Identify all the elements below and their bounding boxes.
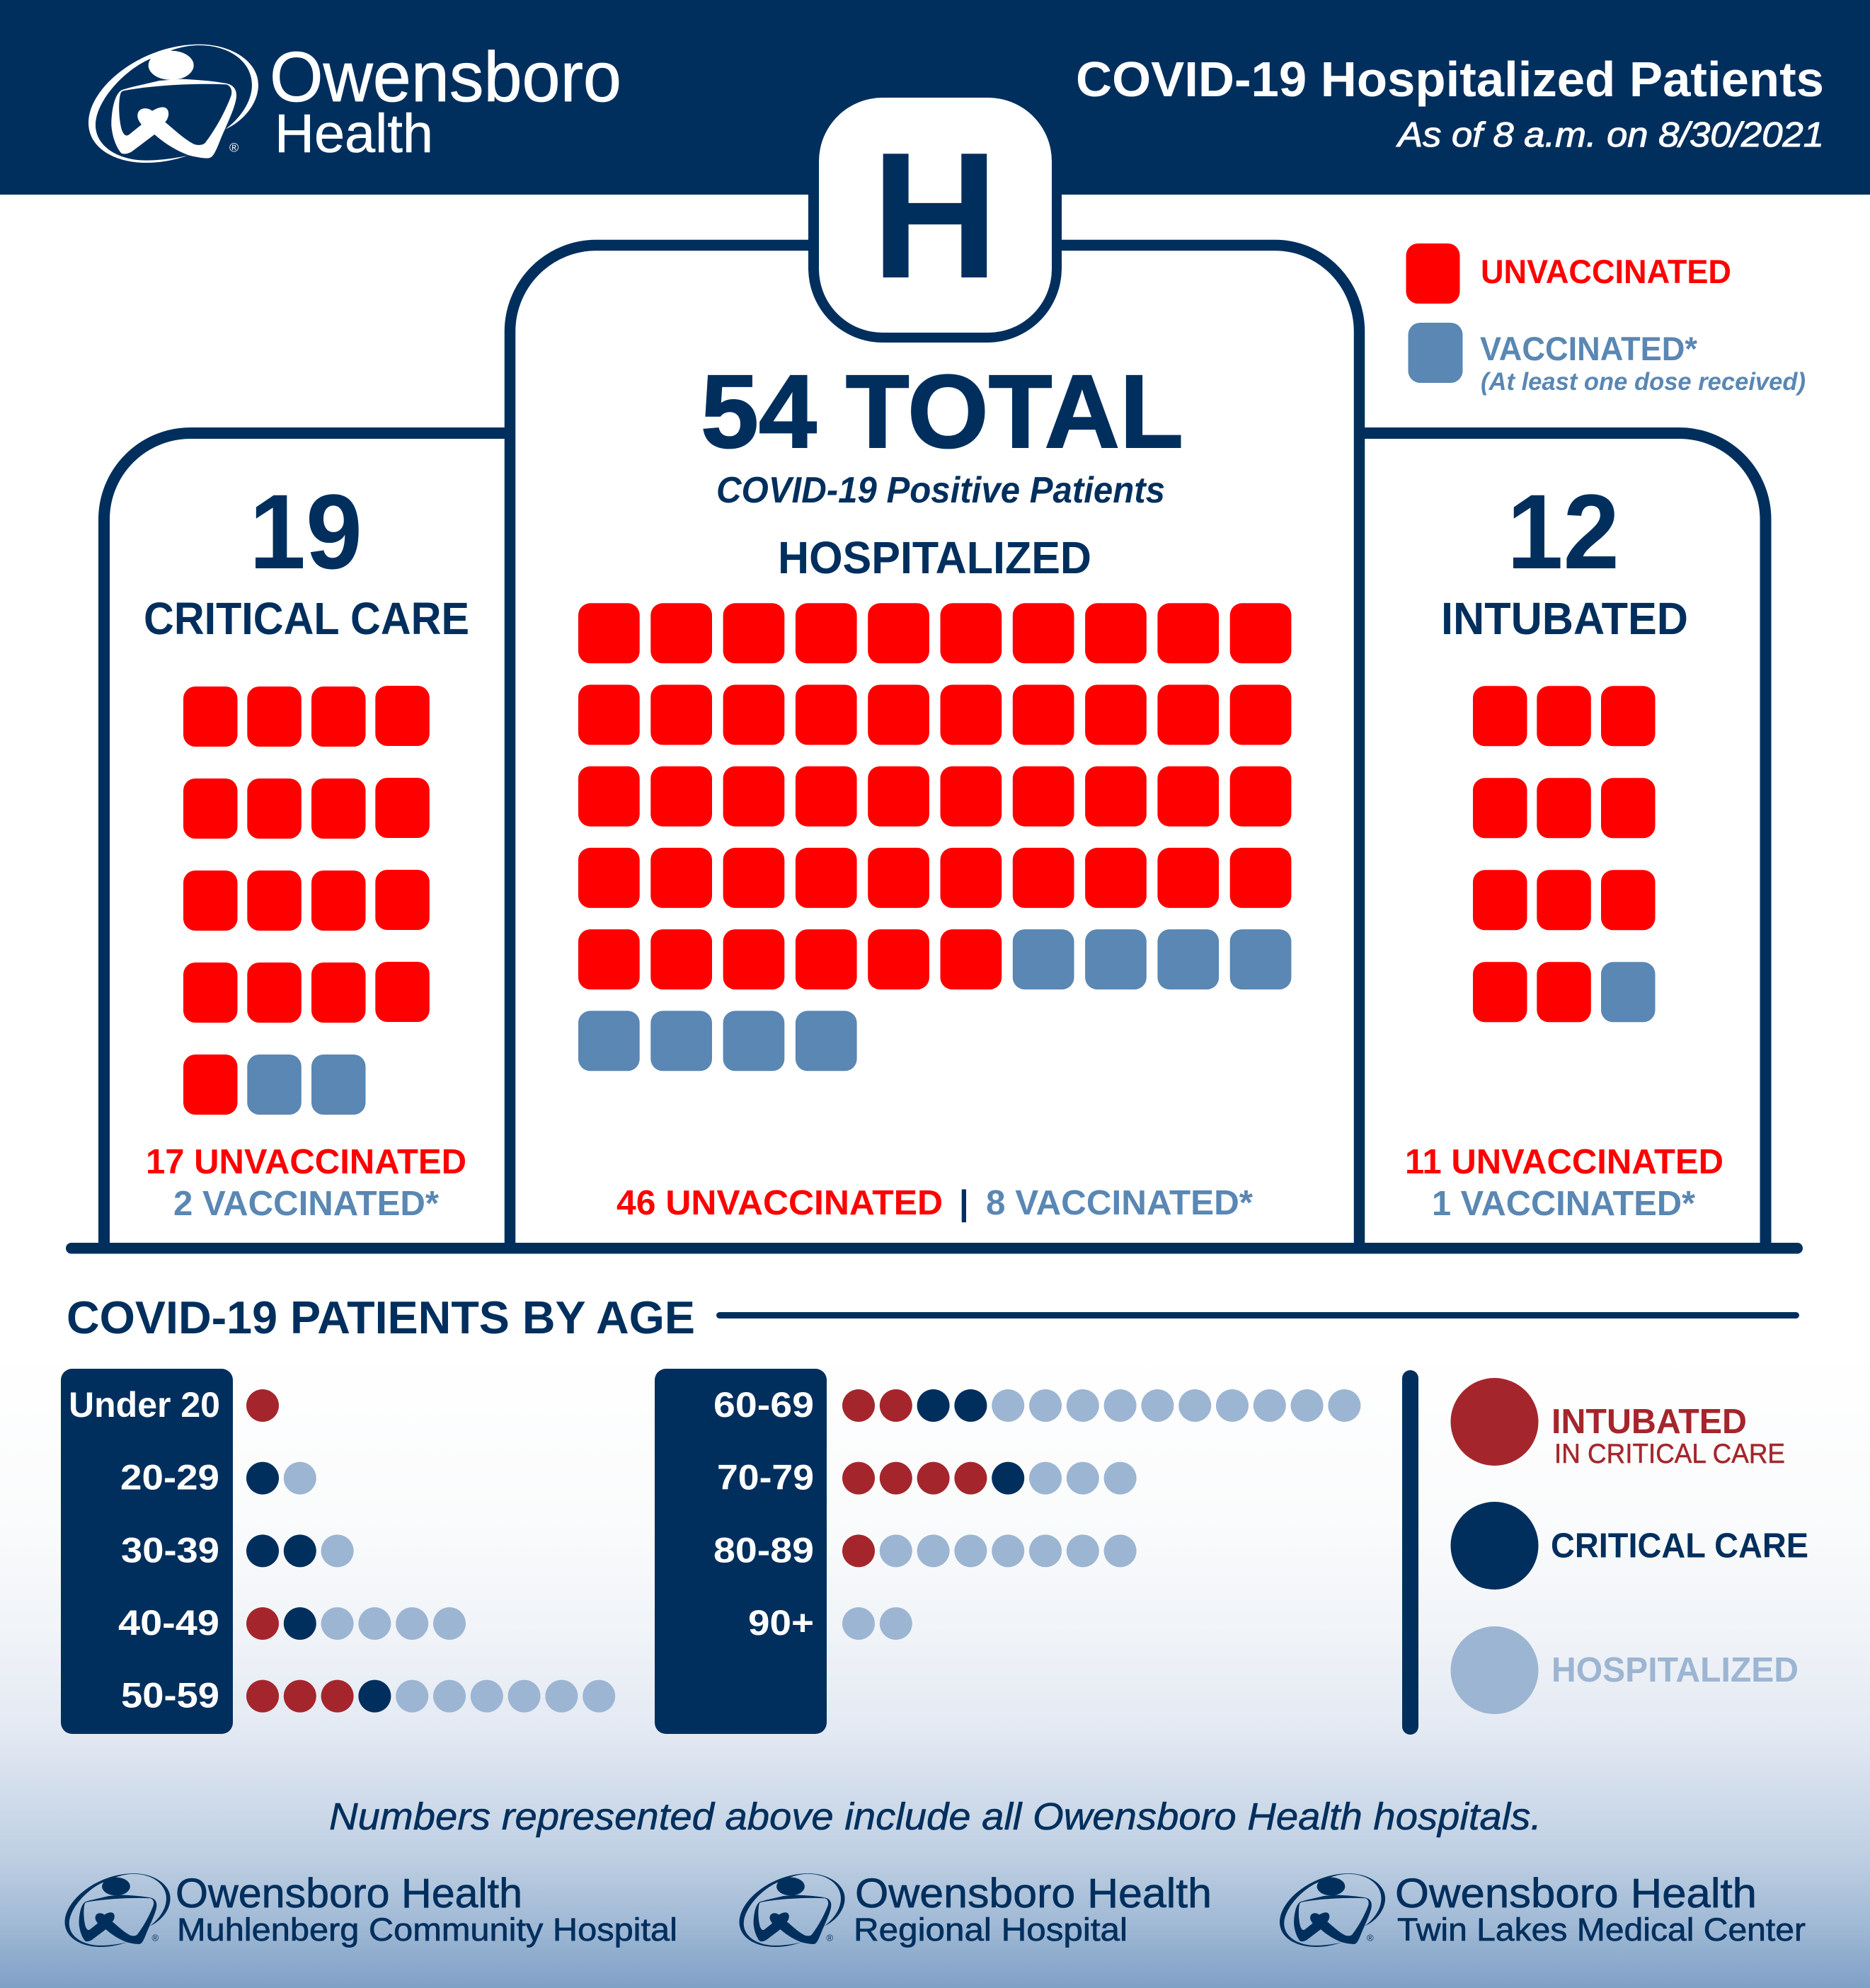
header band [0,0,1870,195]
icon: hospital H sign: H [871,115,999,316]
row: Under 20: Under 20 [69,1385,220,1425]
legend item: critical care: CRITICAL CARE [1551,1527,1808,1565]
intubated number: 12 [1507,472,1619,591]
legend: age chart [1451,1378,1808,1714]
age chart: right column [655,1369,1360,1734]
row: 20-29 [120,1458,316,1498]
baseline rule [66,1243,1803,1254]
icon: logo mark [1280,1873,1385,1947]
icon: logo mark [740,1873,845,1947]
hospital name: Muhlenberg Community Hospital [177,1912,677,1948]
icon: logo mark [65,1873,171,1947]
age section heading: COVID-19 PATIENTS BY AGE [67,1292,695,1343]
row: 40-49 [118,1603,466,1643]
row: 90+: 90+ [748,1603,814,1643]
pictogram: hospitalized patients [578,603,1291,1071]
row: 60-69: 60-69 [713,1385,814,1425]
row: 40-49: 40-49 [118,1603,219,1643]
logo wordmark: Owensboro Health [1395,1871,1757,1917]
legend label unvaccinated: UNVACCINATED [1481,253,1731,290]
logo: Owensboro Health header [88,38,621,164]
row: 50-59 [121,1676,615,1716]
count unvaccinated: 46 UNVACCINATED [616,1184,943,1222]
logo: Twin Lakes Medical Center [1280,1871,1806,1948]
icon: logo mark [88,45,258,163]
row: 90+ [748,1603,912,1643]
critical care number: 19 [249,472,362,591]
intubated counts [1405,1143,1723,1223]
icon: unvaccinated swatch [1406,243,1459,304]
panel: critical care outline [104,433,505,1248]
row: 30-39 [121,1530,354,1570]
logo: Regional Hospital [740,1871,1212,1948]
icon: vaccinated swatch [1409,323,1462,383]
total subtitle: COVID-19 Positive Patients [716,470,1165,511]
logo: Muhlenberg Community Hospital [65,1871,677,1948]
legend item: hospitalized: HOSPITALIZED [1551,1651,1799,1689]
legend: vaccination status [1406,243,1806,396]
legend item: intubated: IN CRITICAL CARE [1554,1439,1785,1469]
icon: logo mark: ® [1367,1933,1374,1943]
row: 30-39: 30-39 [121,1530,219,1570]
count unvaccinated: 17 UNVACCINATED [146,1143,466,1181]
legend item: hospitalized [1451,1626,1799,1714]
critical care counts [146,1143,466,1223]
logo wordmark: Owensboro Health [176,1871,522,1917]
logo sub-wordmark: Health [275,103,433,164]
legend divider [1402,1370,1418,1735]
icon: hospital H sign [808,87,1062,343]
row: 50-59: 50-59 [121,1676,219,1716]
row: 80-89: 80-89 [713,1530,814,1570]
row: 60-69 [713,1385,1360,1425]
age heading rule [716,1312,1799,1318]
count unvaccinated: 11 UNVACCINATED [1405,1143,1723,1181]
count vaccinated: 2 VACCINATED* [173,1185,440,1223]
logo wordmark: Owensboro Health [855,1871,1212,1917]
legend item: intubated: INTUBATED [1551,1403,1747,1441]
panel: intubated outline [1364,433,1765,1248]
age chart: left column [61,1369,615,1734]
date subtitle: As of 8 a.m. on 8/30/2021 [1396,116,1824,154]
total number: 54 TOTAL [701,354,1183,470]
legend note: (At least one dose received) [1481,368,1806,396]
hospital name: Regional Hospital [854,1912,1128,1948]
row: 70-79: 70-79 [717,1458,814,1498]
age label panel [655,1369,827,1734]
footnote: Numbers represented above include all Owensboro Health hospitals. [329,1795,1542,1838]
legend label vaccinated: VACCINATED* [1480,330,1698,367]
hospitalized counts [616,1184,1254,1222]
count vaccinated: 1 VACCINATED* [1432,1185,1696,1223]
row: 80-89 [713,1530,1137,1570]
count vaccinated: 8 VACCINATED* [986,1184,1254,1222]
hospitalized heading: HOSPITALIZED [778,532,1091,583]
icon: logo mark: ® [151,1933,159,1943]
panel: hospitalized outline [510,245,1359,1248]
pictogram: critical care patients [183,686,430,1115]
icon: logo mark: ® [229,141,239,155]
row: 20-29: 20-29 [120,1458,219,1498]
age label panel [61,1369,233,1734]
intubated heading: INTUBATED [1441,593,1688,644]
count separator: | [959,1184,969,1222]
legend item: intubated [1451,1378,1785,1469]
row: 70-79 [717,1458,1137,1498]
title: COVID-19 Hospitalized Patients [1076,52,1824,107]
logo wordmark: Owensboro [270,38,621,117]
hospital name: Twin Lakes Medical Center [1397,1912,1806,1948]
critical care heading: CRITICAL CARE [144,593,469,644]
legend item: critical care [1451,1502,1808,1590]
pictogram: intubated patients [1473,686,1655,1022]
icon: logo mark: ® [826,1933,833,1943]
